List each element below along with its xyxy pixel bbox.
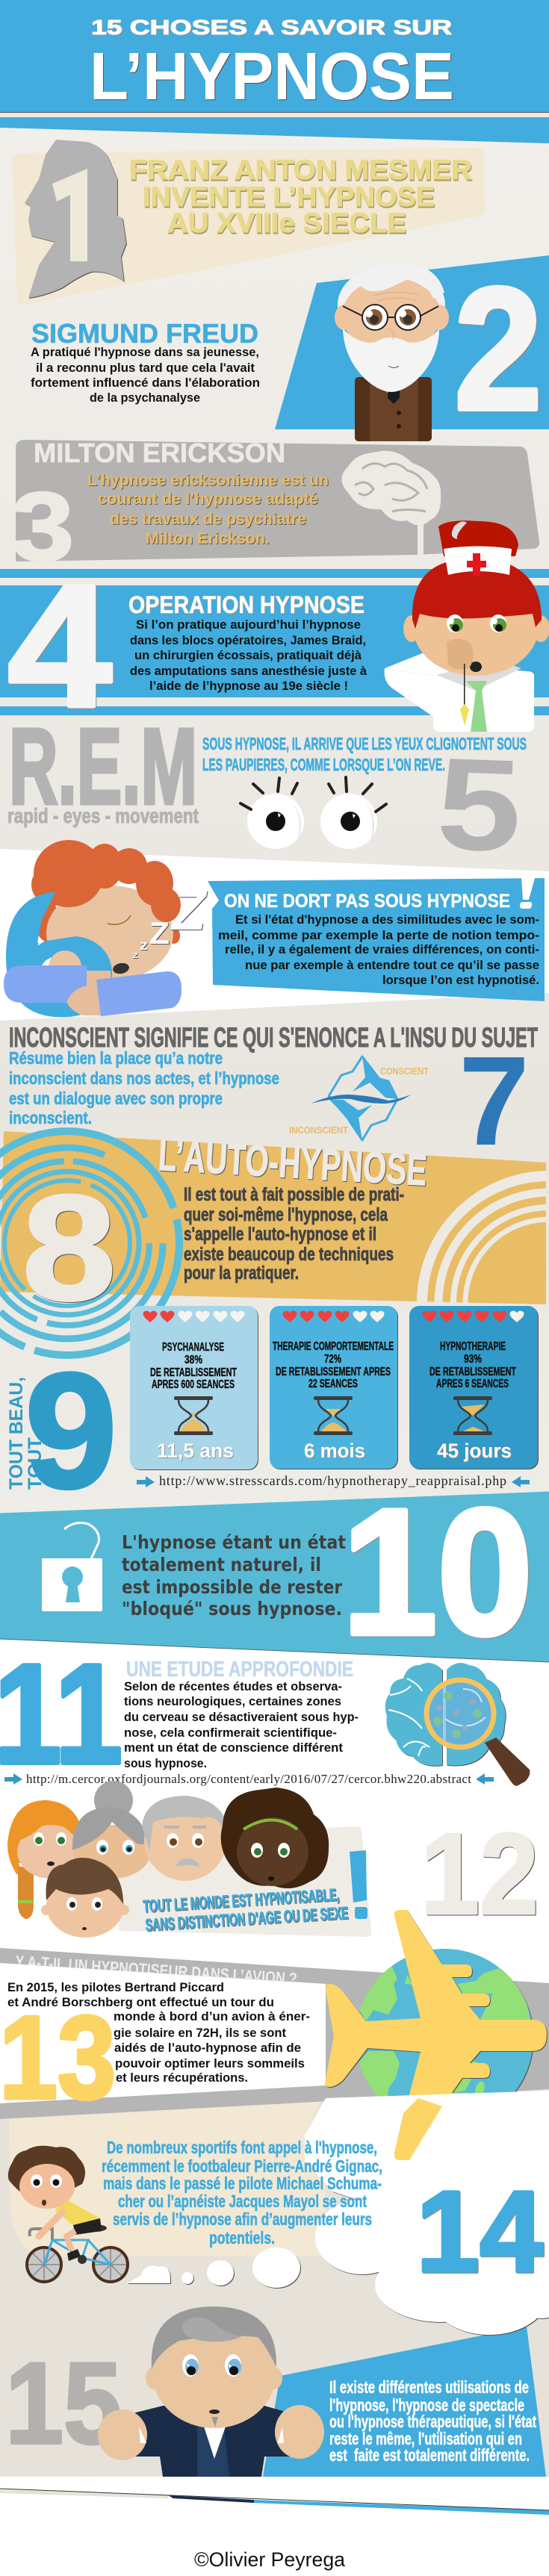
fact 3: Erickson — [16, 440, 539, 561]
number 14: 14 — [416, 2167, 543, 2296]
fact 14: thought cloud — [127, 2135, 549, 2335]
body text: ment un état de conscience différent — [124, 1740, 343, 1755]
hearts — [423, 1311, 524, 1322]
body text: tions neurologiques, certaines zones — [124, 1694, 341, 1708]
fact 7: inconscient — [9, 1022, 538, 1172]
card text: THERAPIE COMPORTEMENTALE — [273, 1340, 394, 1353]
card text: 38% — [184, 1354, 202, 1366]
body text: servis de l’hypnose afin d’augmenter leurs — [113, 2209, 372, 2229]
body text: Résume bien la place qu’a notre — [9, 1048, 223, 1068]
snoring letters — [132, 880, 212, 960]
heading: INVENTE L’HYPNOSE — [143, 181, 435, 212]
body text — [202, 734, 527, 774]
label: conscient: CONSCIENT — [380, 1065, 429, 1077]
fact 10: blocked — [0, 1472, 549, 1672]
body text — [122, 1531, 346, 1620]
body text: Si l’on pratique aujourd’hui l’hypnose — [136, 617, 361, 632]
heading: UNE ETUDE APPROFONDIE — [126, 1658, 353, 1681]
illustration: man in suit — [98, 2306, 324, 2477]
body text: A pratiqué l'hypnose dans sa jeunesse, — [31, 345, 259, 359]
card text: PSYCHANALYSE — [162, 1341, 224, 1354]
icon: open eyes — [241, 777, 386, 849]
number 8: 8 — [22, 1165, 116, 1331]
fact 15: man and text — [5, 2306, 536, 2477]
body text — [184, 1184, 404, 1284]
body text: cher ou l’apnéiste Jacques Mayol se sont — [118, 2191, 367, 2211]
heading: FRANZ ANTON MESMER — [129, 155, 472, 185]
heading: AU XVIIIe SIECLE — [167, 208, 406, 238]
label: inconscient: INCONSCIENT — [289, 1124, 348, 1136]
body text: est impossible de rester — [122, 1576, 343, 1598]
header — [0, 0, 549, 143]
duration: 6 mois — [304, 1440, 365, 1462]
icon: brain — [341, 451, 441, 555]
body text: "bloqué" sous hypnose. — [122, 1598, 342, 1620]
callout text — [218, 912, 539, 987]
arrow left — [4, 1773, 22, 1785]
body text: L’hypnose ericksonienne est un — [87, 472, 329, 489]
body text: courant de l’hypnose adapté — [98, 491, 318, 508]
body text: Il est tout à fait possible de prati- — [184, 1184, 404, 1205]
body text: pour la pratiquer. — [184, 1263, 299, 1284]
callout text: Et si l'état d'hypnose a des similitudes avec le som- — [235, 912, 539, 927]
number 15: 15 — [5, 2339, 122, 2468]
right maze arcs — [417, 1171, 546, 1302]
fact 12: everyone — [7, 1781, 539, 1938]
arrow right — [512, 1476, 530, 1487]
card: psychanalyse — [130, 1306, 258, 1469]
face: woman with curly hair — [221, 1788, 329, 1888]
number 5: 5 — [435, 731, 524, 880]
white lower background — [0, 1523, 549, 2576]
body text: inconscient. — [9, 1108, 92, 1127]
vertical label — [6, 1377, 46, 1490]
body text — [130, 617, 367, 693]
number 2: 2 — [454, 251, 542, 447]
card text: DE RETABLISSEMENT — [150, 1366, 237, 1379]
body text: et André Borschberg ont effectué un tour du — [7, 1995, 274, 2009]
callout text: meil, comme par exemple la perte de notion tempo- — [218, 928, 539, 942]
icon: open padlock — [42, 1523, 102, 1611]
vertical label: TOUT — [25, 1437, 46, 1490]
heading: OPERATION HYPNOSE — [128, 591, 365, 618]
card: therapie comportementale — [270, 1306, 397, 1469]
heading — [129, 155, 472, 238]
body text: existe beaucoup de techniques — [184, 1244, 394, 1265]
body text: inconscient dans nos actes, et l’hypnose — [9, 1068, 279, 1088]
body text: quer soi-même l'hypnose, cela — [184, 1204, 388, 1225]
left maze rings — [0, 1131, 179, 1355]
card: hypnotherapie — [409, 1306, 538, 1469]
R.E.M heading: R.E.M — [9, 706, 197, 827]
body text — [124, 1679, 359, 1770]
title line 2: L’HYPNOSE — [90, 40, 454, 114]
number 13: 13 — [0, 1992, 116, 2124]
card text — [150, 1341, 237, 1391]
snoring letters: z — [132, 950, 138, 960]
body text: de la psychanalyse — [90, 391, 200, 405]
duration: 45 jours — [437, 1440, 512, 1462]
face: grandfather — [142, 1796, 230, 1881]
body text: est un dialogue avec son propre — [9, 1089, 223, 1108]
card text — [273, 1340, 394, 1390]
body text: pouvoir optimer leurs sommeils — [115, 2056, 305, 2071]
card text: 93% — [464, 1353, 482, 1366]
portrait of Freud — [335, 263, 449, 441]
callout heading: ON NE DORT PAS SOUS HYPNOSE — [224, 891, 510, 912]
body text: potentiels. — [209, 2228, 275, 2247]
fact 13: plane — [0, 1910, 549, 2119]
exclamation mark — [520, 878, 535, 909]
body text: et leurs récupérations. — [116, 2071, 248, 2085]
fact 14: sportsmen — [8, 2138, 543, 2296]
statement text — [143, 1885, 349, 1935]
illustration: nurse with pendulum — [385, 520, 549, 732]
card text — [429, 1340, 516, 1390]
upper cloud white — [305, 2091, 549, 2165]
icon: silhouette with number 1 — [25, 140, 126, 298]
body text — [102, 2138, 382, 2247]
card text: APRES 6 SEANCES — [436, 1378, 509, 1390]
body text: des travaux de psychiatre — [110, 511, 306, 528]
source url: http://www.stresscards.com/hypnotherapy_reappraisal.php — [159, 1473, 506, 1488]
card text: APRES 600 SEANCES — [152, 1378, 235, 1391]
exclamation mark — [350, 1850, 367, 1919]
vertical label: TOUT BEAU, — [6, 1377, 27, 1490]
body text: récemment le footbaleur Pierre-André Gignac, — [102, 2156, 382, 2176]
icon: globe — [359, 1949, 533, 2097]
card text: 22 SEANCES — [308, 1378, 358, 1390]
body text: L'hypnose étant un état — [122, 1531, 346, 1553]
card text: DE RETABLISSEMENT APRES — [276, 1366, 391, 1378]
callout text: nue par exemple à entendre tout ce qu’il se passe — [245, 958, 539, 972]
fact 2: Freud — [31, 251, 549, 447]
body text: Selon de récentes études et observa- — [124, 1679, 342, 1693]
body text — [329, 2377, 536, 2465]
snoring letters: Z — [167, 880, 212, 942]
body text: gie solaire en 72H, ils se sont — [114, 2026, 286, 2040]
number 1 — [52, 169, 87, 261]
number 9: 9 — [25, 1339, 117, 1522]
band heading: Y A-T-IL UN HYPNOTISEUR DANS L’AVION ? — [15, 1952, 298, 1988]
illustration: cyclist — [8, 2146, 128, 2282]
body text: sous hypnose. — [124, 1756, 207, 1770]
heading: MILTON ERICKSON — [34, 438, 285, 468]
body text: fortement influencé dans l'élaboration — [31, 376, 260, 390]
number 4: 4 — [7, 548, 112, 744]
snoring letters: z — [140, 938, 148, 953]
icon: hourglass — [314, 1396, 353, 1435]
body text: s'appelle l'auto-hypnose et il — [184, 1224, 376, 1245]
illustration: sleeping person with number 6 — [4, 840, 208, 1017]
body text: l’aide de l’hypnose au 19e siècle ! — [149, 679, 348, 693]
body text — [9, 1048, 279, 1127]
fact 15: blue panel — [263, 2327, 546, 2477]
face: girl with braid — [7, 1800, 84, 1919]
number 3: 3 — [11, 472, 74, 581]
body text: monde à bord d’un avion à éner- — [114, 2009, 310, 2023]
body text: En 2015, les pilotes Bertrand Piccard — [7, 1980, 224, 1994]
source url: http://m.cercor.oxfordjournals.org/content/early/2016/07/27/cercor.bhw220.abstract — [26, 1772, 471, 1786]
title line 1: 15 CHOSES A SAVOIR SUR — [91, 16, 452, 39]
icon: iceberg — [311, 1057, 411, 1140]
body text: nose, cela confirmerait scientifique- — [124, 1726, 337, 1740]
body text: il a reconnu plus tard que cela l'avait — [36, 361, 255, 375]
copyright: ©Olivier Peyrega — [194, 2548, 346, 2571]
icon: plane — [325, 1910, 547, 2160]
body text: des amputations sans anesthésie juste à — [130, 664, 367, 678]
statement text: SANS DISTINCTION D'AGE OU DE SEXE — [145, 1903, 349, 1935]
body text: totalement naturel, il — [122, 1554, 321, 1575]
bottom slanted edge — [0, 2477, 549, 2576]
body text: un chirurgien écossais, pratiquait déjà — [134, 648, 362, 662]
body text: aidés de l’auto-hypnose afin de — [114, 2041, 301, 2055]
arrow right — [476, 1773, 494, 1785]
icon: hourglass — [174, 1396, 213, 1435]
callout text: relle, il y a également de vraies différences, on conti- — [225, 942, 539, 956]
icon: hourglass — [453, 1396, 492, 1435]
fact 4: operation — [0, 520, 549, 744]
face: grandmother — [72, 1781, 151, 1879]
hearts — [143, 1311, 245, 1322]
fact 8: auto-hypnose — [0, 1127, 546, 1359]
card text: HYPNOTHERAPIE — [440, 1340, 506, 1353]
plane lower wing tip — [394, 2098, 442, 2160]
body text: Milton Erickson. — [146, 530, 270, 547]
face: boy — [41, 1858, 129, 1938]
icon: brain and magnifier — [385, 1663, 530, 1786]
paper background — [0, 0, 549, 1523]
heading: SIGMUND FREUD — [31, 318, 258, 349]
body text: De nombreux sportifs font appel à l'hypnose, — [107, 2138, 377, 2157]
callout — [208, 878, 545, 1001]
fact 5: REM — [7, 706, 527, 880]
number 6: 6 — [0, 858, 118, 1051]
number 10: 10 — [342, 1472, 533, 1672]
arrow left — [137, 1476, 155, 1487]
number 7: 7 — [459, 1030, 530, 1172]
fact 9: comparison — [6, 1306, 538, 1522]
body text — [87, 472, 329, 547]
callout text: lorsque l’on est hypnotisé. — [382, 973, 539, 987]
statement text: TOUT LE MONDE EST HYPNOTISABLE, — [143, 1885, 340, 1916]
fact 6: sleep — [0, 840, 549, 1021]
body text — [7, 1980, 310, 2085]
hearts — [282, 1311, 384, 1322]
fact 11: study — [0, 1635, 530, 1793]
card text: 72% — [324, 1353, 341, 1366]
heading: L’AUTO-HYPNOSE — [157, 1131, 428, 1195]
body text: du cerveau se désactiveraient sous hyp- — [124, 1710, 359, 1724]
body text — [31, 345, 260, 405]
body text: dans les blocs opératoires, James Braid, — [130, 633, 366, 647]
number 12: 12 — [421, 1809, 539, 1938]
body text: mais dans le passé le pilote Michael Schuma- — [103, 2174, 382, 2193]
fact 1: Mesmer — [12, 140, 485, 305]
duration: 11,5 ans — [157, 1440, 234, 1462]
subtitle: rapid - eyes - movement — [7, 804, 199, 827]
snoring letters: Z — [149, 915, 170, 951]
fact 14 background: paper and cream — [0, 2087, 549, 2477]
